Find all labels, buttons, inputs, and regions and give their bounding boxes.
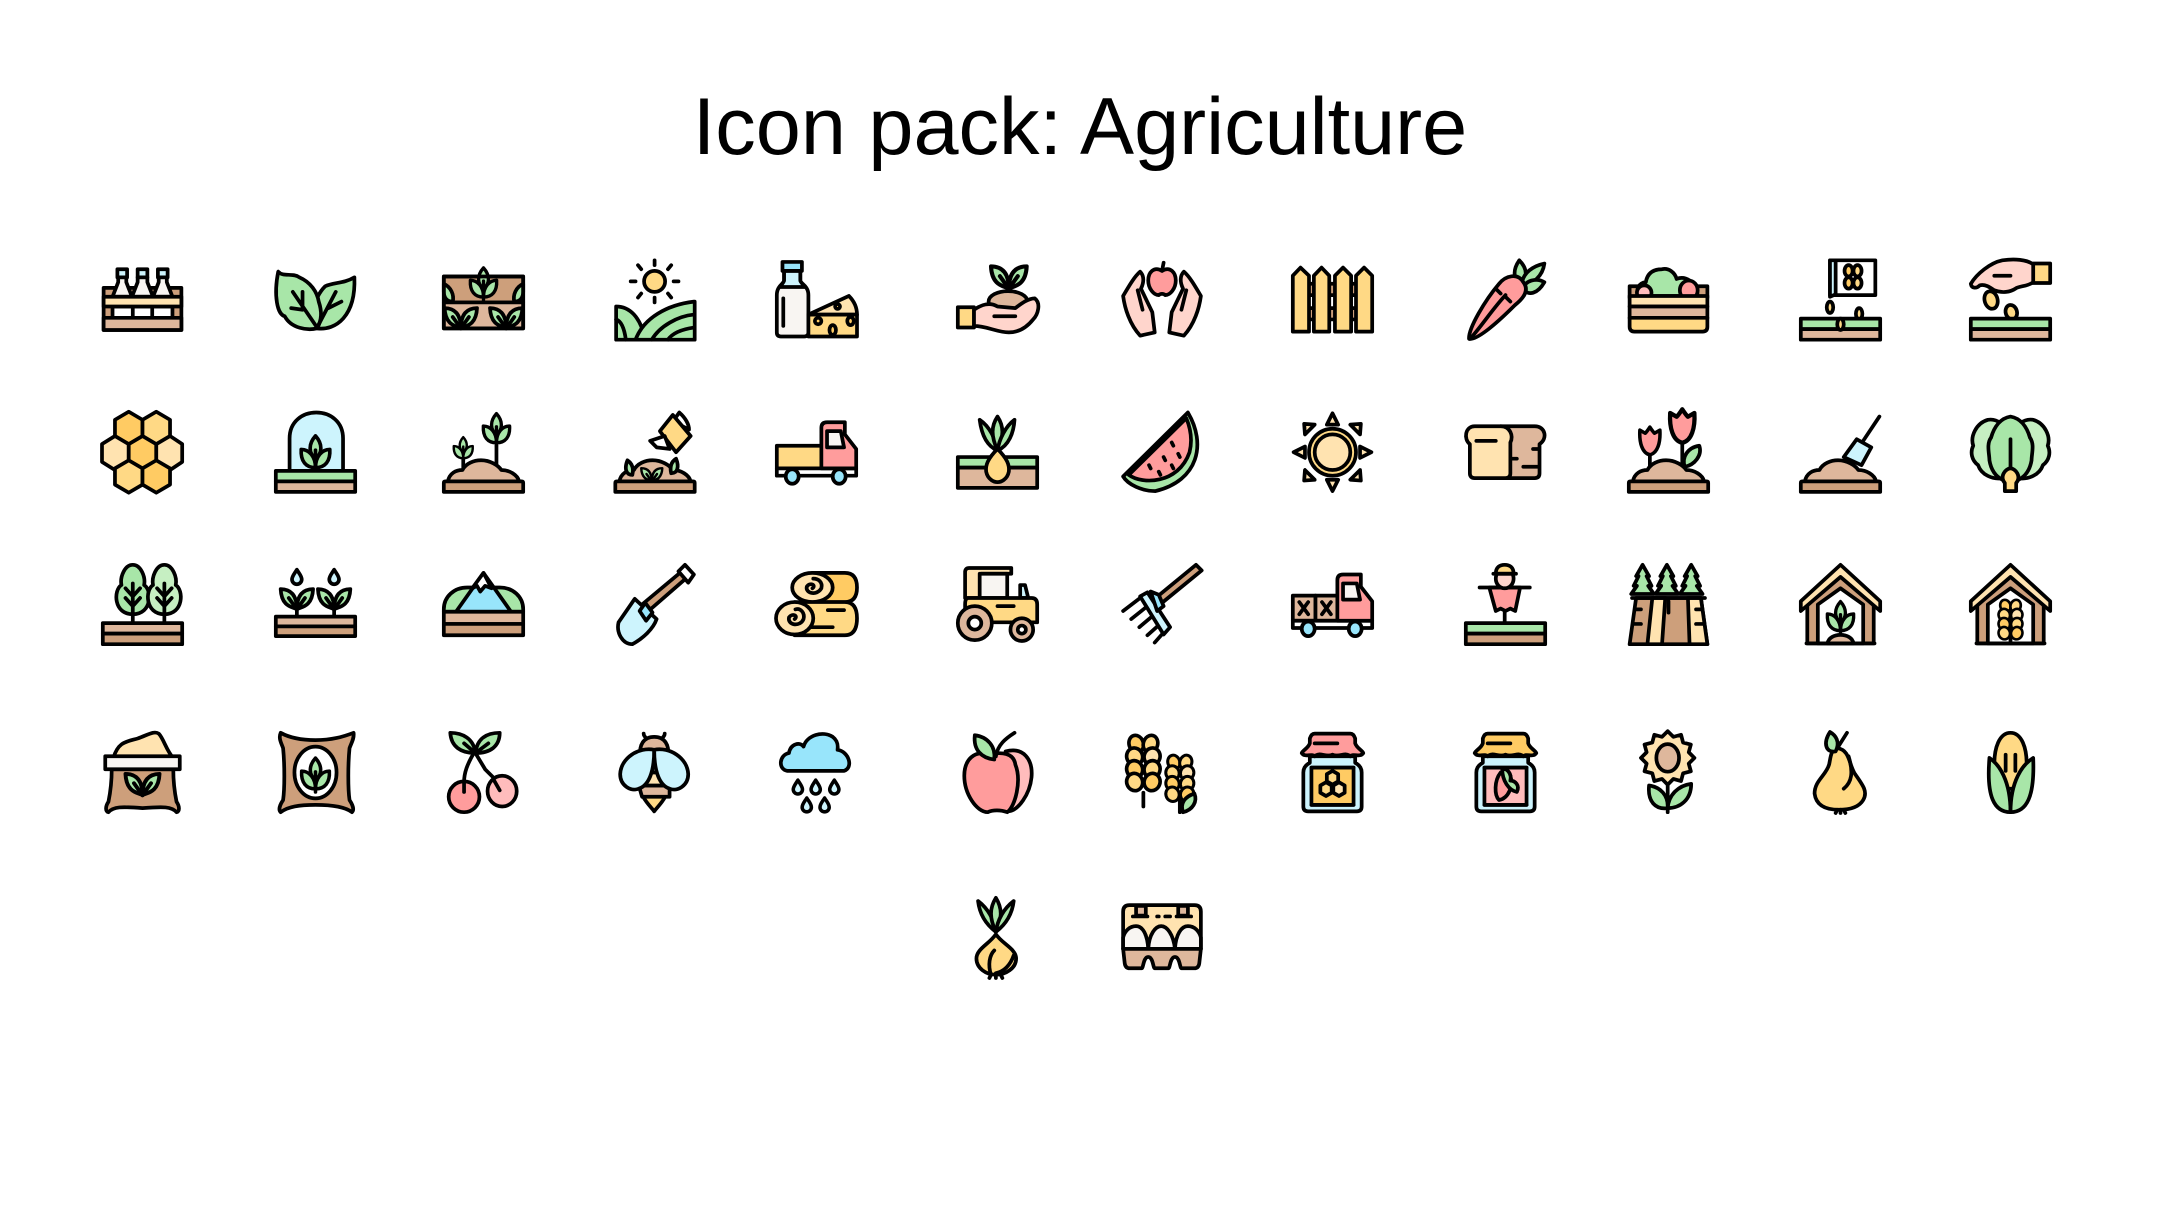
icon: bulb in soil (958, 417, 1037, 488)
icon: barn with wheat (1971, 565, 2050, 643)
icon: shovel (618, 565, 694, 644)
icon: hay rolls (776, 573, 857, 635)
icon: scarecrow (1466, 565, 1545, 644)
icon: truck with crates (1293, 575, 1372, 636)
icon: onion (976, 898, 1016, 978)
icon: sun over hills (616, 260, 695, 340)
icon: watering can over soil (615, 413, 695, 492)
icon: watermelon slice (1123, 413, 1197, 491)
icon: bee (620, 734, 688, 811)
icon: two trees in soil (103, 565, 182, 644)
icon: egg carton (1123, 905, 1201, 968)
icon: plants on mound (444, 414, 523, 492)
title: Icon pack: Agriculture (693, 82, 1467, 172)
icon: cherries (449, 733, 517, 812)
icon: corn (1989, 733, 2033, 812)
icon: flour sack (105, 733, 180, 812)
icon: carrot (1469, 260, 1544, 339)
icon: honeycomb (102, 412, 182, 493)
icon: seed packet and soil (1801, 260, 1880, 340)
icon: wheat (1124, 733, 1196, 812)
icon: lettuce (1972, 417, 2049, 491)
icon: honey jar (1302, 734, 1363, 811)
icon: hand dropping seeds (1971, 260, 2050, 340)
icon: seed bag (280, 733, 354, 812)
icon: hands cradling apple (1123, 263, 1201, 336)
icon: mountain and fields (444, 573, 523, 635)
icon: bread loaf (1466, 426, 1545, 478)
icon: rain cloud (781, 734, 849, 812)
icon: pear (1815, 732, 1865, 813)
icon: garden plot (444, 268, 523, 328)
icon: sun (1294, 413, 1371, 491)
icon: leaves (276, 272, 354, 329)
icon: sprouts with water drops (276, 570, 355, 636)
icon: yellow pickup truck (777, 422, 856, 484)
icon: barn with plant (1801, 565, 1880, 643)
icon: strawberry jam jar (1475, 734, 1536, 811)
icon: greenhouse dome (276, 413, 355, 492)
icon: shovel in mound (1801, 417, 1880, 492)
icon: forest and road field (1630, 565, 1707, 644)
icon: wooden fence (1293, 268, 1372, 332)
icon: rake (1123, 565, 1202, 643)
icon: vegetable crate (1630, 269, 1707, 332)
icon: apple (964, 733, 1032, 812)
icon: sunflower (1641, 731, 1694, 812)
icon: tractor (958, 568, 1037, 641)
icon: milk bottle and cheese (777, 262, 857, 336)
icon: hand holding sprout (958, 266, 1038, 332)
icon: milk crate (104, 269, 181, 330)
icon: tulips on mound (1629, 409, 1708, 492)
